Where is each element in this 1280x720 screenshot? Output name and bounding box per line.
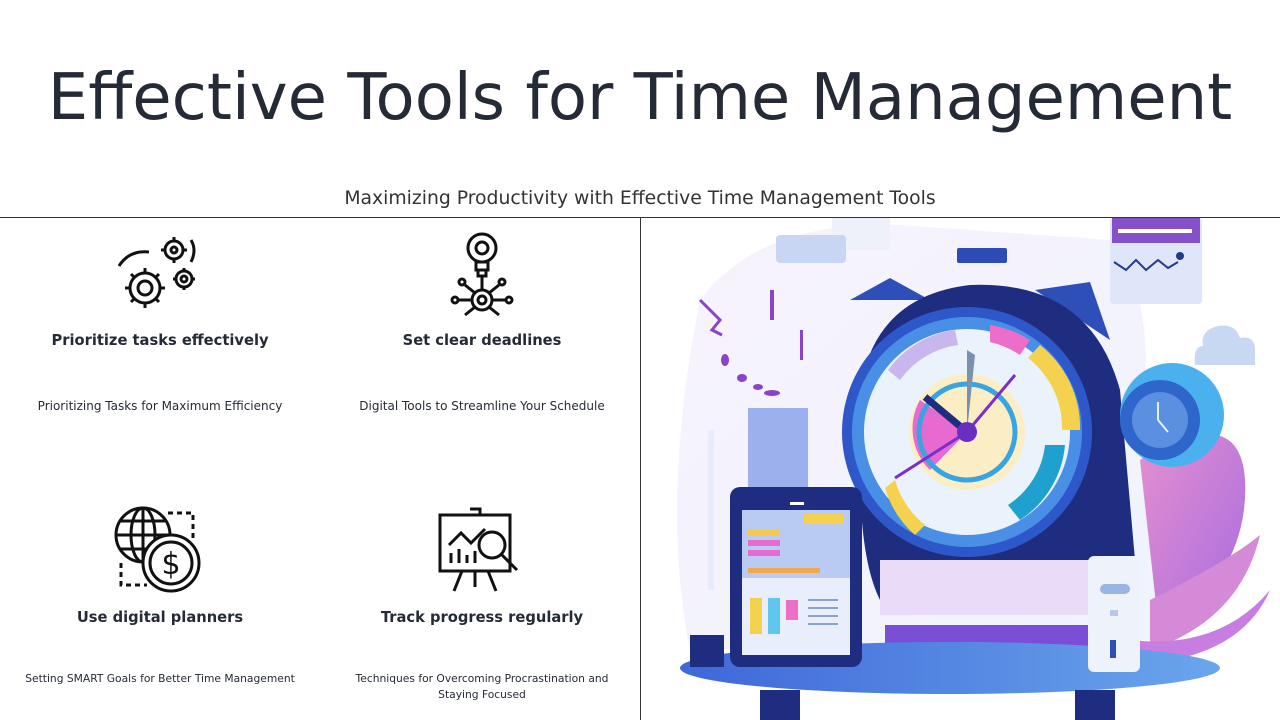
- tablet: [730, 487, 862, 667]
- icon: gears: [118, 237, 196, 308]
- icon: globe dollar: $: [161, 547, 181, 582]
- subtitle: Maximizing Productivity with Effective Time Management Tools: [344, 188, 936, 209]
- side bars: [748, 408, 808, 498]
- icon: presentation magnifier: [438, 508, 518, 592]
- illustration: clock on desk: [677, 218, 1270, 720]
- clock body: [842, 278, 1135, 610]
- text: Setting SMART Goals for Better Time Management: [25, 672, 295, 685]
- cloud: [1195, 326, 1255, 365]
- heading: Track progress regularly: [381, 609, 583, 626]
- card: set deadlines: [359, 232, 605, 413]
- heading: Use digital planners: [77, 609, 243, 626]
- title: Effective Tools for Time Management: [48, 61, 1232, 135]
- card: top chart: [1110, 218, 1202, 304]
- background blob: [677, 225, 1160, 650]
- card: prioritize tasks: [38, 237, 282, 413]
- card: digital planners: [25, 506, 295, 685]
- text: Techniques for Overcoming Procrastination and Staying Focused: [356, 672, 608, 701]
- cup: [1088, 556, 1140, 672]
- text: Prioritizing Tasks for Maximum Efficiency: [38, 399, 282, 413]
- small side clock: [1120, 363, 1224, 467]
- purple dots: [700, 290, 803, 396]
- heading: Prioritize tasks effectively: [51, 332, 269, 349]
- table: [680, 560, 1220, 720]
- text: Digital Tools to Streamline Your Schedule: [359, 399, 605, 413]
- heading: Set clear deadlines: [403, 332, 561, 349]
- card: track progress: [355, 508, 608, 701]
- icon: lightbulb circuit: [450, 232, 514, 316]
- leaf: [1140, 434, 1245, 640]
- icon: globe dollar: [114, 506, 200, 592]
